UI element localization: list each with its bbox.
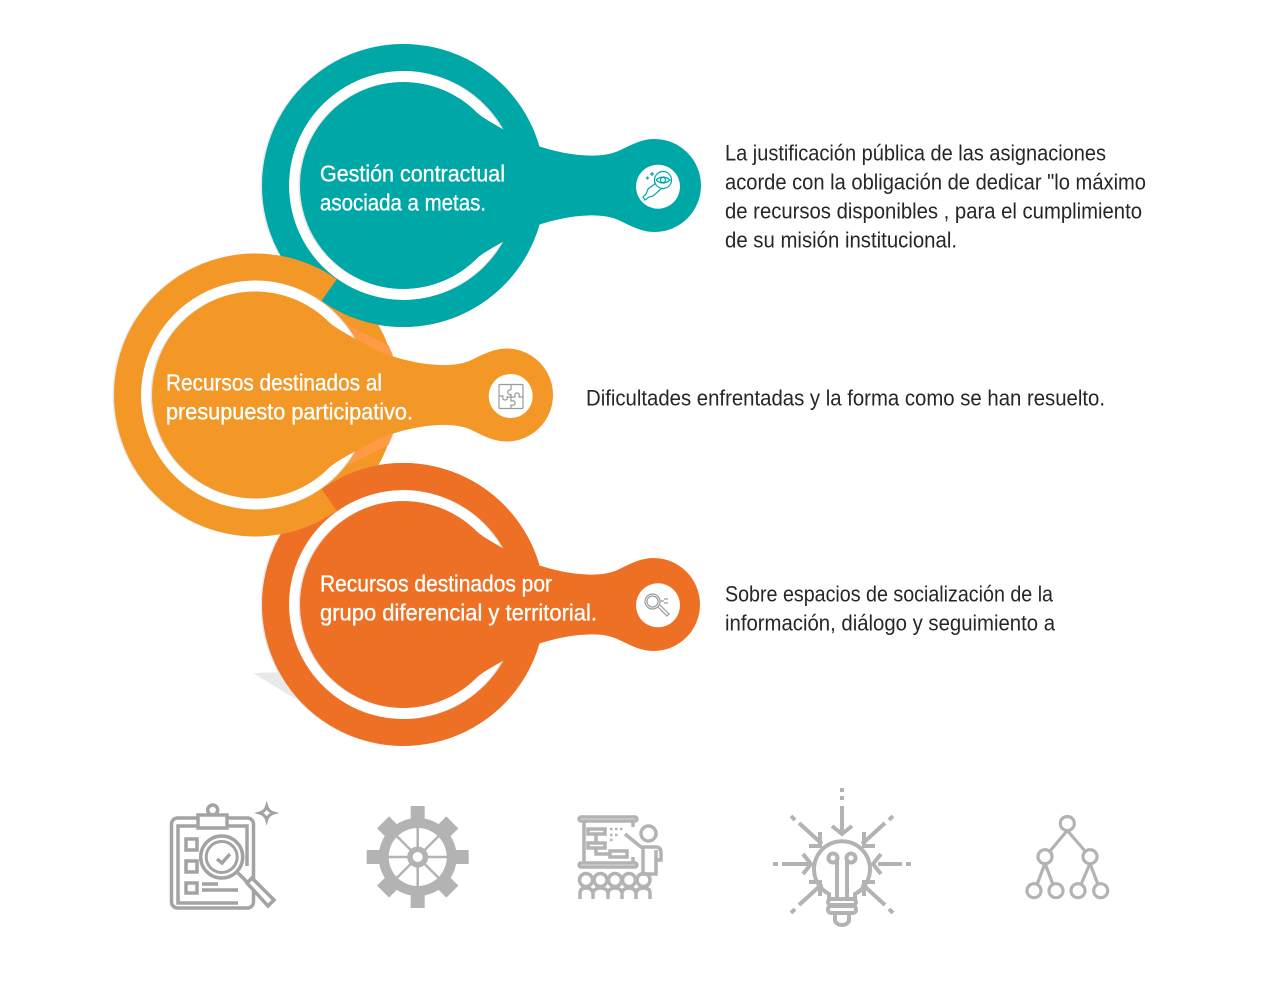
text block: justificación pública — [725, 140, 1146, 252]
text block: espacios de socialización — [725, 582, 1056, 636]
icon: gear wheel — [367, 806, 469, 908]
icon: light bulb with arrows — [773, 788, 911, 925]
shadow: bottom left wedge — [253, 672, 302, 703]
text block: justificación pública: La justificación pública de las asignaciones — [725, 140, 1106, 166]
heading: presupuesto participativo: presupuesto participativo. — [166, 398, 413, 424]
text block: justificación pública: acorde con la obligación de dedicar "lo máximo — [725, 170, 1146, 194]
icon: orange badge puzzle — [489, 374, 533, 418]
heading: Gestión contractual — [320, 160, 505, 216]
heading: presupuesto participativo: Recursos destinados al — [166, 370, 382, 396]
panel: dark orange interlock overlay — [322, 463, 540, 566]
heading: presupuesto participativo — [166, 370, 413, 424]
icon: hierarchy tree — [1027, 816, 1108, 898]
heading: grupo diferencial y territorial — [320, 570, 597, 626]
heading: Gestión contractual: asociada a metas. — [320, 190, 486, 216]
panel: dark orange shape base — [260, 463, 700, 746]
text block: justificación pública: de recursos disponibles , para el cumplimiento — [725, 198, 1142, 224]
panel: teal interlock overlay — [322, 224, 540, 327]
icon: clipboard with magnifier — [172, 805, 274, 908]
heading: Gestión contractual: Gestión contractual — [320, 160, 505, 186]
text block: espacios de socialización: Sobre espacios de socialización de la — [725, 582, 1054, 606]
panel: teal shape base — [260, 44, 701, 327]
text block: justificación pública: de su misión institucional. — [725, 228, 957, 252]
icon: teal badge pen and eye — [636, 165, 680, 209]
panel: orange shape — [112, 254, 553, 536]
heading: grupo diferencial y territorial: Recursos destinados por — [320, 570, 552, 596]
icon: dark orange badge magnifier — [636, 583, 680, 627]
text block: dificultades: Dificultades enfrentadas y la forma como se han resuelto. — [586, 386, 1105, 410]
heading: grupo diferencial y territorial: grupo diferencial y territorial. — [320, 600, 597, 626]
icon: presenter with audience — [579, 817, 661, 899]
text block: espacios de socialización: información, diálogo y seguimiento a — [725, 610, 1056, 636]
